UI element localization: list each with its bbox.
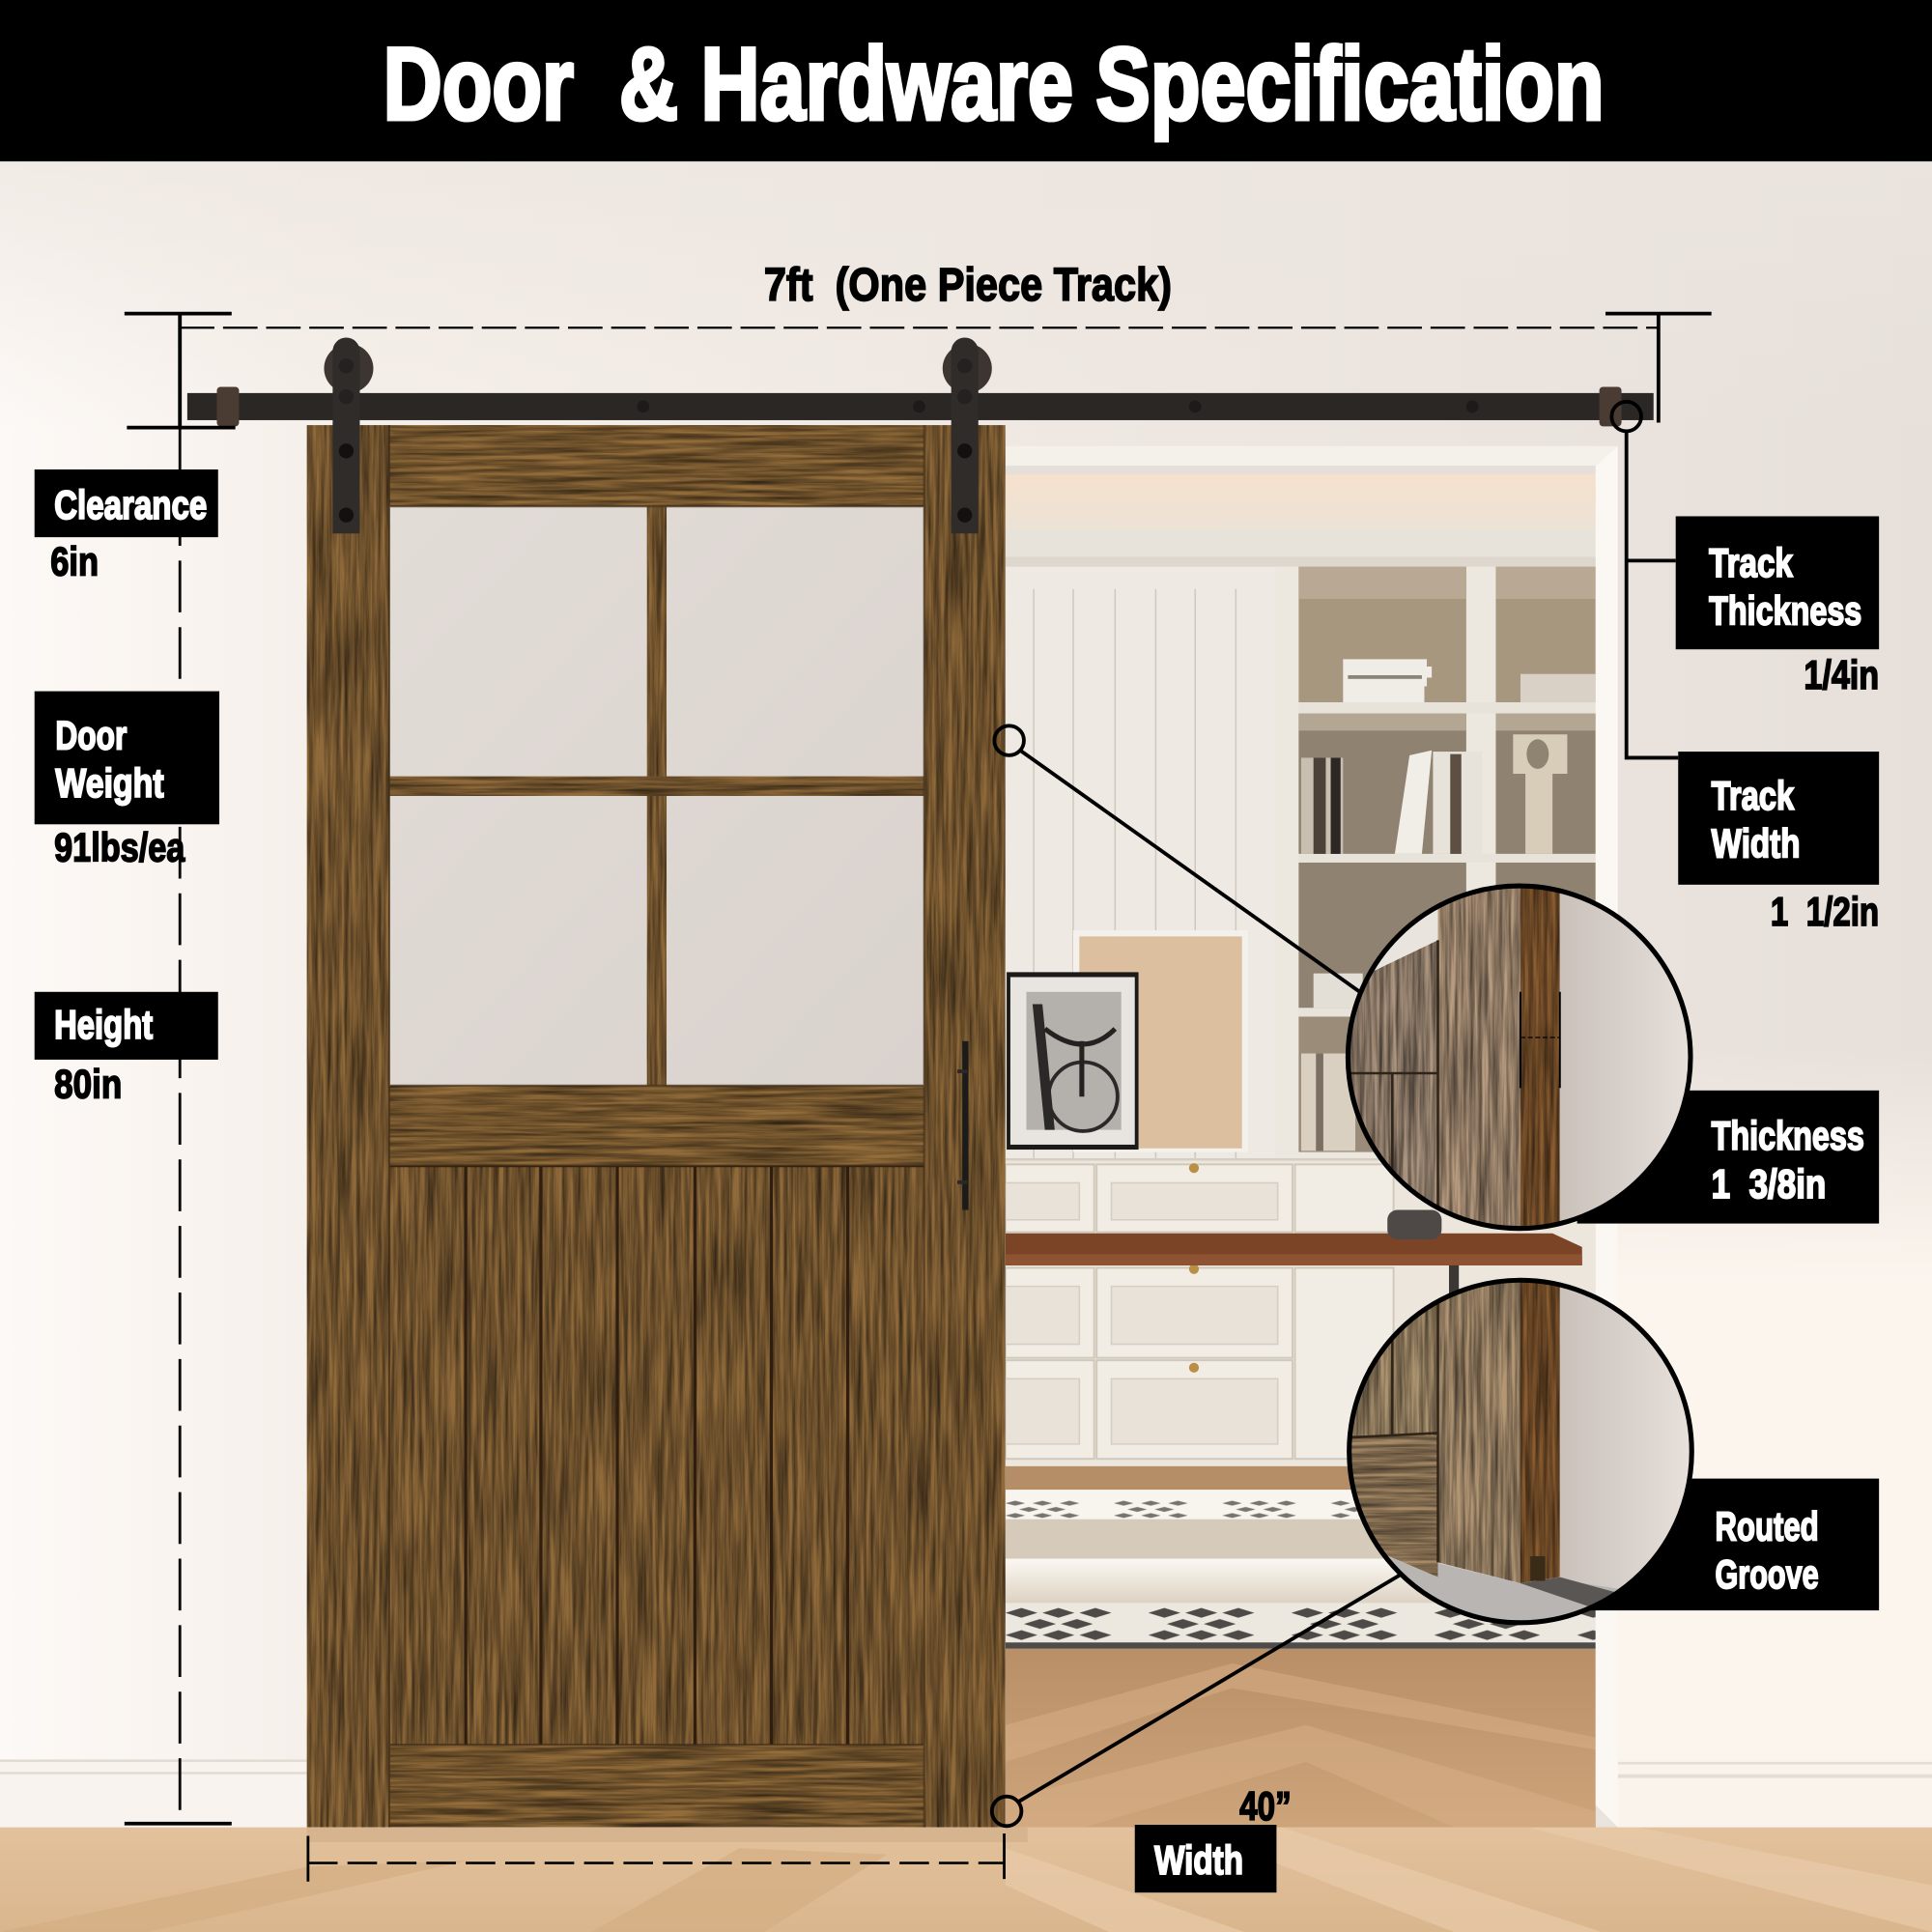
title: Door & Hardware Specification <box>384 26 1605 142</box>
label: track width: 1 1/2in <box>1771 889 1879 934</box>
wainscot wall <box>1006 567 1275 1158</box>
table and cup <box>1006 1210 1582 1339</box>
label: height: 80in <box>54 1061 122 1106</box>
books <box>1301 659 1596 1151</box>
frame stiles and rails <box>307 425 1006 1828</box>
barn door <box>307 425 1006 1828</box>
bookcase <box>1275 567 1596 1158</box>
left hanger <box>324 337 373 533</box>
floor <box>0 1828 1932 1932</box>
dimension lines <box>125 313 1712 1882</box>
room seen through opening <box>1006 446 1596 1828</box>
track and hardware <box>187 337 1654 533</box>
glass panes <box>389 506 924 1086</box>
label: track thickness <box>1676 516 1879 697</box>
track bar <box>187 393 1654 420</box>
right hanger <box>943 337 992 533</box>
label: clearance <box>35 469 218 584</box>
label: clearance: 6in <box>50 539 99 584</box>
label: door thickness <box>1577 1091 1879 1224</box>
cabinets <box>1006 1158 1596 1466</box>
label: track width <box>1678 752 1879 934</box>
label: track thickness: Thickness <box>1709 588 1861 634</box>
mullions <box>389 506 924 1086</box>
detail circle: routed groove <box>1343 1275 1700 1633</box>
label: track width: Track <box>1712 773 1795 818</box>
label: height: Height <box>54 1002 153 1047</box>
label: height <box>35 992 218 1106</box>
label: track thickness: Track <box>1709 540 1793 585</box>
door handle <box>957 1041 969 1210</box>
track bolts <box>637 401 1479 412</box>
label: routed groove <box>1540 1479 1879 1610</box>
framed art <box>1007 930 1248 1152</box>
label: track width: Width <box>1712 821 1801 867</box>
baseboards <box>0 1759 1932 1828</box>
label: clearance: Clearance <box>54 482 207 527</box>
label: door thickness: 1 3/8in <box>1712 1161 1826 1207</box>
label: width: 40” <box>1239 1783 1292 1829</box>
leader lines and markers <box>992 402 1678 1826</box>
detail circle: door thickness <box>1343 881 1695 1238</box>
end stops <box>216 387 1622 426</box>
label: width <box>1135 1783 1292 1892</box>
label: door weight <box>35 692 219 870</box>
ceiling light cove <box>1006 446 1596 567</box>
track length label: 7ft (One Piece Track) <box>764 259 1172 311</box>
label: routed groove: Routed <box>1716 1503 1819 1548</box>
title bar <box>0 0 1932 161</box>
label: door weight: Door <box>55 713 127 758</box>
rug <box>1006 1490 1596 1649</box>
label: track thickness: 1/4in <box>1804 652 1879 697</box>
label: door thickness: Thickness <box>1712 1113 1864 1158</box>
label: door weight: Weight <box>55 760 164 806</box>
label: routed groove: Groove <box>1716 1551 1819 1597</box>
back floor <box>1006 1466 1596 1828</box>
plank panel <box>389 1166 924 1745</box>
door opening trim <box>1006 446 1618 1828</box>
label: door weight: 91lbs/ea <box>54 825 185 870</box>
label: width: Width <box>1154 1837 1243 1883</box>
